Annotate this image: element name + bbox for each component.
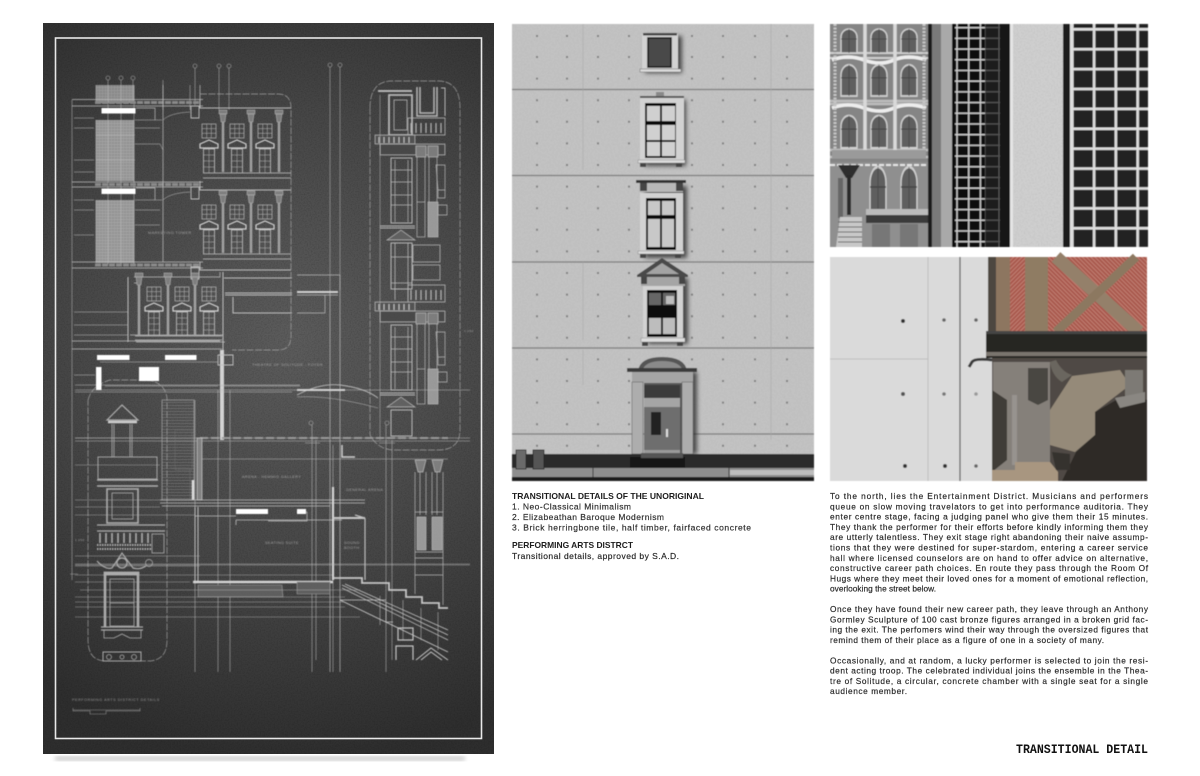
stepped section bottom right — [333, 578, 448, 660]
hatch blocks: marketing tower — [96, 85, 135, 265]
drawing labels: GENERAL ARENA — [346, 488, 383, 492]
right tall columns — [415, 460, 443, 605]
paragraph 2: Once they have found their new career path, they leave through an Anthony — [830, 604, 1149, 614]
drawing labels: BOOTH — [344, 546, 360, 550]
paragraph 3: dent acting troop. The celebrated individual joins the ensemble in the Thea- — [830, 666, 1148, 676]
dark carved beam — [986, 331, 1147, 358]
tower floor slabs — [72, 85, 300, 440]
drawing title and scale bar: PERFORMING ARTS DISTRICT DETAILS — [72, 698, 160, 702]
paragraph 1: To the north, lies the Entertainment District. Musicians and performers — [830, 491, 1148, 501]
paragraph 3 — [830, 655, 1148, 696]
photo: concrete facade with stacked windows — [512, 24, 814, 481]
herringbone brick and timber frame — [988, 257, 1147, 332]
concrete wall — [512, 24, 814, 481]
drawing linework — [70, 63, 474, 714]
panel shadow — [55, 756, 465, 761]
paragraph 1: constructive career path choices. En route they pass through the Room Of — [830, 563, 1149, 573]
drawing labels: MARKETING TOWER — [148, 231, 192, 235]
photo: neo-classical and modernist elevations — [830, 24, 1148, 247]
carved post and figure — [992, 358, 1147, 481]
drawing labels: SEATING SUITE — [265, 541, 299, 545]
drawing labels: ARENA - HEMMIG GALLERY — [242, 475, 301, 479]
stair hatching section — [162, 400, 194, 500]
photo: fairfaced concrete, half timber and carved figure — [830, 257, 1147, 481]
concrete half — [830, 257, 992, 481]
axis bubbles — [72, 63, 389, 580]
lower left elevation — [70, 405, 360, 661]
paragraph 2: remind them of their place as a figure of one in a society of many. — [830, 635, 1104, 645]
list items: 2. Elizabeathan Baroque Modernism — [512, 512, 664, 522]
caption heading: TRANSITIONAL DETAILS OF THE UNORIGINAL — [512, 491, 704, 501]
tower windows — [135, 110, 291, 340]
paragraph 3: audience member. — [830, 686, 907, 696]
paragraph 1: overlooking the street below. — [830, 584, 936, 594]
paragraph 2: ing the exit. The perfomers wind their way through the oversized figures that — [830, 625, 1149, 635]
white grid facade — [1063, 24, 1148, 247]
arena hall walls and slabs — [75, 438, 470, 597]
white solid bars — [96, 108, 306, 514]
dark window grid tower — [952, 24, 1010, 247]
window shadows — [645, 36, 697, 454]
paragraph 1: are utterly talentless. They exit stage right abandoning their naive assump- — [830, 532, 1148, 542]
street base band — [512, 453, 814, 481]
rounded outline boxes — [88, 81, 460, 661]
right elevation — [375, 87, 447, 440]
drawing labels: 1:250 — [464, 329, 474, 333]
footer title: TRANSITIONAL DETAIL — [1016, 743, 1148, 757]
tie holes — [536, 35, 788, 447]
paragraph 1: queue on slow moving travelators to get into performance auditoria. They — [830, 501, 1149, 511]
panel: blueprint drawing on black board — [43, 23, 494, 761]
caption: transitional details list — [512, 491, 751, 561]
doorway — [627, 357, 697, 455]
paragraph 1: enter centre stage, facing a judging panel who give them their 15 minutes. — [830, 512, 1148, 522]
pale concrete tower — [1010, 24, 1063, 247]
paragraph 1: hall where licensed counselors are on hand to offer advice on alternative, — [830, 553, 1148, 563]
body text — [830, 491, 1149, 696]
list items: 1. Neo-Classical Minimalism — [512, 502, 631, 512]
white frame — [56, 38, 482, 738]
paragraph 3: tre of Solitude, a circular, concrete chamber with a single seat for a single — [830, 676, 1148, 686]
paragraph 1: They thank the performer for their efforts before kindly informing them they — [830, 522, 1149, 532]
paragraph 1: tions that they were destined for super-stardom, entering a career service — [830, 542, 1148, 552]
paragraph 1: Hugs where they meet their loved ones for a moment of emotional reflection, — [830, 573, 1148, 583]
mid structure lines — [75, 275, 470, 672]
board background — [43, 23, 494, 754]
district heading: PERFORMING ARTS DISTRCT — [512, 540, 634, 550]
paragraph 2: Gormley Sculpture of 100 cast bronze figures arranged in a broken grid fac- — [830, 614, 1148, 624]
list items: 3. Brick herringbone tile, half timber, fairfaced concrete — [512, 522, 751, 532]
drawing labels: 1:250 — [75, 538, 85, 542]
bins — [516, 450, 544, 469]
window 4 with pediment — [637, 258, 688, 346]
dark and concrete strips — [928, 24, 952, 247]
drawing title and scale bar — [72, 698, 160, 714]
list items — [512, 502, 751, 532]
window 3 — [636, 180, 686, 258]
ornate building — [830, 24, 928, 247]
drawing labels: THEATRE OF SOLITUDE - FOYER — [252, 363, 323, 367]
paragraph 2 — [830, 604, 1149, 645]
window 1 — [640, 33, 681, 72]
drawing labels: SOUND — [344, 541, 360, 545]
window 2 — [638, 92, 685, 167]
iron hook — [969, 359, 992, 367]
drawing labels — [75, 231, 474, 550]
paragraph 1 — [830, 491, 1149, 594]
wall joints — [512, 90, 814, 434]
district note: Transitional details, approved by S.A.D. — [512, 551, 679, 561]
paragraph 3: Occasionally, and at random, a lucky performer is selected to join the resi- — [830, 655, 1148, 665]
